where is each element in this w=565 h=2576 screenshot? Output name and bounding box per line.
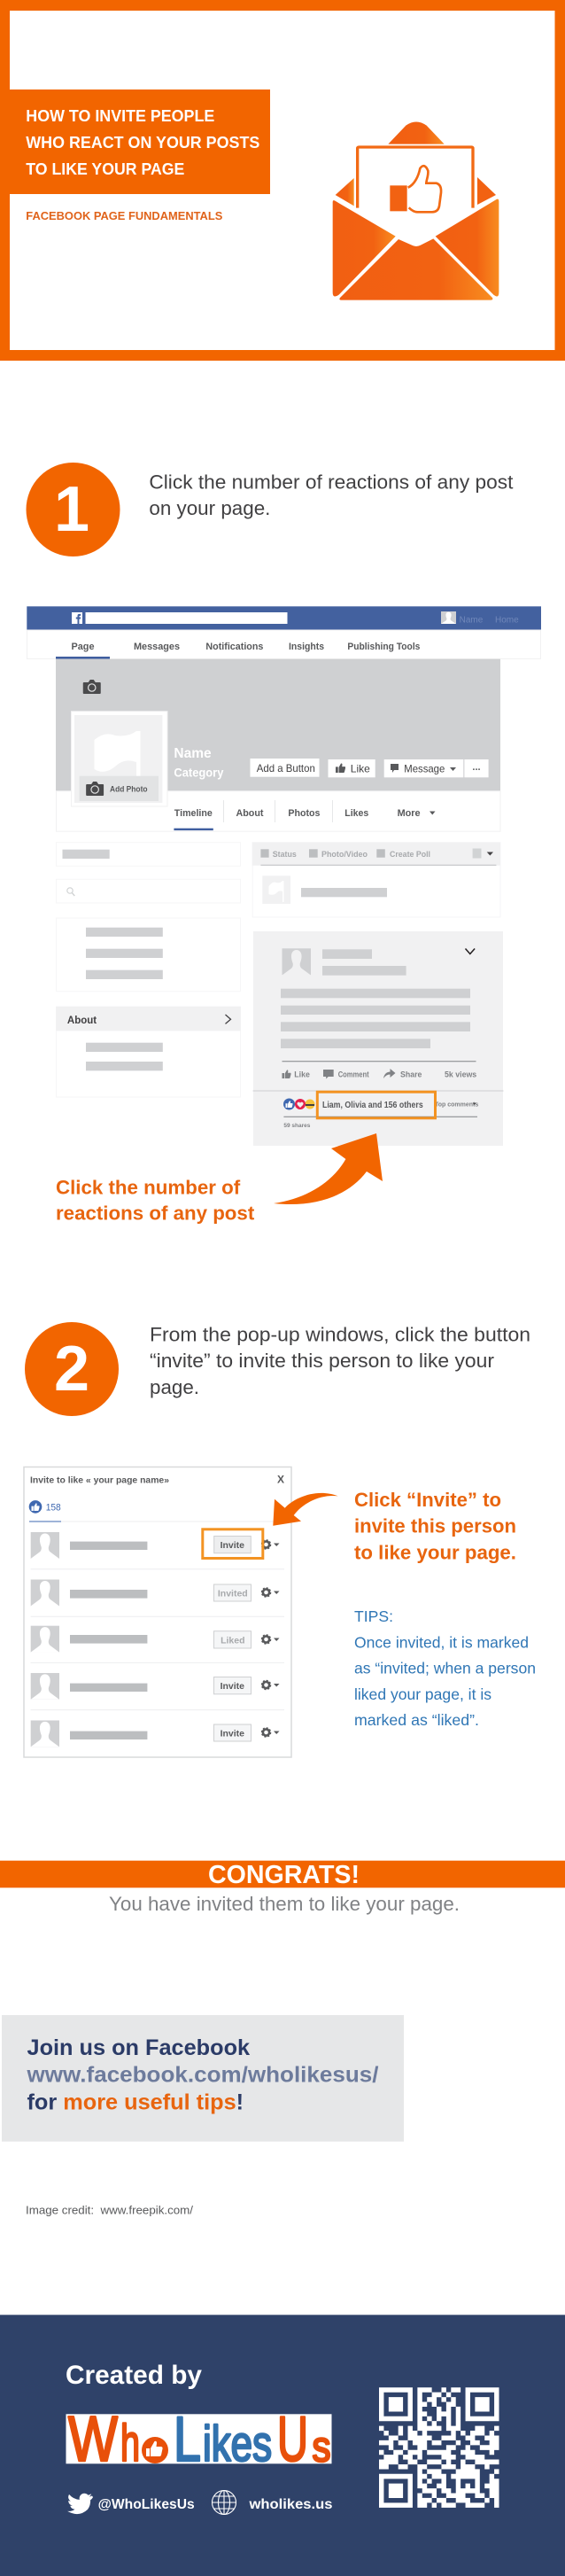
step 2 instruction (150, 1324, 530, 1398)
page tabs (27, 630, 540, 659)
congrats banner: CONGRATS! (208, 1861, 360, 1889)
icon: envelope with thumbs up (333, 122, 499, 300)
message button: ... (472, 762, 481, 773)
composer: Photo/Video (321, 850, 368, 860)
step 1 instruction: Click the number of reactions of any post (149, 471, 514, 494)
post actions (282, 1069, 476, 1079)
callout text: Click the number of (56, 1177, 241, 1199)
number badge 1: 1 (54, 474, 89, 545)
box: short label (57, 843, 241, 866)
page tabs: Page (71, 642, 94, 652)
panel: join us: Join us on Facebook (27, 2035, 251, 2060)
add a button: Add a Button (257, 762, 315, 774)
invite row 5 (31, 1720, 279, 1747)
logo: ikes (203, 2416, 272, 2472)
step 2 instruction: “invite” to invite this person to like your (150, 1350, 494, 1372)
number badge 2 (25, 1322, 119, 1416)
title box: TO LIKE YOUR PAGE (26, 160, 184, 178)
arrow: to invite button (273, 1493, 338, 1526)
icon: globe (213, 2490, 236, 2515)
callout text (56, 1177, 255, 1225)
post actions: 5k views (445, 1070, 476, 1079)
tips: as “invited; when a person (354, 1660, 536, 1677)
panel: header (0, 0, 565, 361)
congrats message: You have invited them to like your page. (109, 1893, 460, 1915)
congrats banner (0, 1861, 565, 1889)
invite row 4: Invite (221, 1681, 244, 1692)
post card: 59 shares (283, 1123, 311, 1129)
step 2 instruction: page. (150, 1376, 199, 1398)
panel: join us: www.facebook.com/wholikesus/ (26, 2063, 379, 2088)
post card (253, 931, 503, 1146)
step 1 (27, 463, 514, 556)
page tabs: Insights (289, 642, 324, 652)
invite row 4 (31, 1673, 279, 1700)
logo: L (174, 2405, 201, 2475)
tips (354, 1607, 536, 1729)
step 1 instruction: on your page. (149, 497, 270, 519)
invite row 1 (31, 1529, 279, 1559)
reaction icons (283, 1099, 315, 1109)
invite row 3: Liked (221, 1636, 245, 1646)
qr code (379, 2390, 499, 2505)
tips: marked as “liked”. (354, 1711, 479, 1729)
invite row 1: Invite (221, 1540, 244, 1551)
post actions: Share (400, 1070, 422, 1079)
step 2 (25, 1322, 530, 1416)
like button (328, 759, 375, 777)
arrow (274, 1133, 383, 1204)
number badge 1 (27, 463, 120, 556)
composer: Status (273, 850, 297, 860)
box: list (57, 918, 241, 992)
message button (384, 759, 489, 777)
top bar (27, 606, 541, 630)
number badge 2: 2 (54, 1334, 89, 1405)
cover photo: Category (174, 767, 224, 780)
tips: Once invited, it is marked (354, 1633, 529, 1651)
page nav row: About (236, 808, 264, 819)
tips: liked your page, it is (354, 1685, 491, 1703)
website: wholikes.us (248, 2497, 333, 2512)
add a button (250, 759, 319, 777)
callout: click invite: invite this person (354, 1515, 516, 1537)
box: search (57, 879, 241, 903)
post card: Liam, Olivia and 156 others (322, 1100, 423, 1110)
post actions: Like (294, 1070, 310, 1079)
popup: invite to like: Invite to like « your page name» (30, 1475, 169, 1485)
twitter handle: @WhoLikesUs (98, 2497, 195, 2512)
created by: Created by (66, 2361, 202, 2390)
top bar: Home (495, 615, 519, 626)
title box: HOW TO INVITE PEOPLE (26, 107, 214, 125)
profile picture (71, 712, 167, 806)
step 2 instruction: From the pop-up windows, click the button (150, 1324, 530, 1346)
popup: invite to like: X (277, 1473, 284, 1485)
page tabs: Notifications (205, 642, 263, 652)
highlight box (317, 1092, 436, 1118)
facebook page mockup (27, 606, 541, 1146)
page nav row: Photos (288, 808, 320, 819)
page nav row: Timeline (174, 808, 213, 819)
invite row 3 (31, 1626, 279, 1653)
cover photo: Name (174, 746, 212, 761)
title box (0, 89, 270, 194)
popup: invite to like (24, 1467, 291, 1757)
page nav row (57, 791, 500, 831)
page nav row: Likes (344, 808, 368, 819)
logo: h (120, 2415, 140, 2472)
callout: click reactions (56, 1133, 383, 1225)
composer (252, 843, 500, 917)
logo (66, 2404, 331, 2475)
tips: TIPS: (354, 1607, 393, 1625)
profile picture: Add Photo (110, 785, 148, 795)
page tabs: Messages (134, 642, 180, 652)
callout: click invite: Click “Invite” to (354, 1489, 501, 1511)
subtitle: FACEBOOK PAGE FUNDAMENTALS (26, 209, 223, 222)
panel: footer (0, 2315, 565, 2576)
composer: Create Poll (390, 850, 430, 860)
icon: twitter (67, 2494, 93, 2514)
box: about: About (67, 1016, 97, 1026)
image credit: Image credit: www.freepik.com/ (26, 2204, 193, 2217)
panel: join us: for more useful tips! (27, 2090, 244, 2115)
step 1 instruction (149, 471, 514, 519)
callout: click invite (354, 1489, 516, 1563)
post actions: Comment (338, 1070, 369, 1079)
invite row 5: Invite (221, 1728, 244, 1739)
cover photo (56, 659, 500, 791)
left column (56, 843, 241, 1097)
logo: W (68, 2404, 118, 2475)
title box: WHO REACT ON YOUR POSTS (26, 134, 259, 152)
like count (29, 1500, 61, 1514)
page tabs: Publishing Tools (347, 642, 420, 652)
message button: Message (404, 762, 445, 774)
like count: 158 (46, 1502, 61, 1513)
highlight box (203, 1529, 263, 1558)
post card: Top comments (435, 1102, 478, 1108)
panel: join us (2, 2015, 404, 2142)
like button: Like (351, 762, 370, 774)
box: about (56, 1007, 241, 1097)
logo: s (312, 2424, 331, 2471)
callout text: reactions of any post (56, 1202, 255, 1225)
invite row 2: Invited (218, 1588, 248, 1599)
callout: click invite: to like your page. (354, 1541, 516, 1563)
top bar: Name (460, 615, 484, 626)
invite row 2 (31, 1579, 279, 1606)
page nav row: More (398, 808, 421, 819)
logo: U (277, 2405, 308, 2475)
